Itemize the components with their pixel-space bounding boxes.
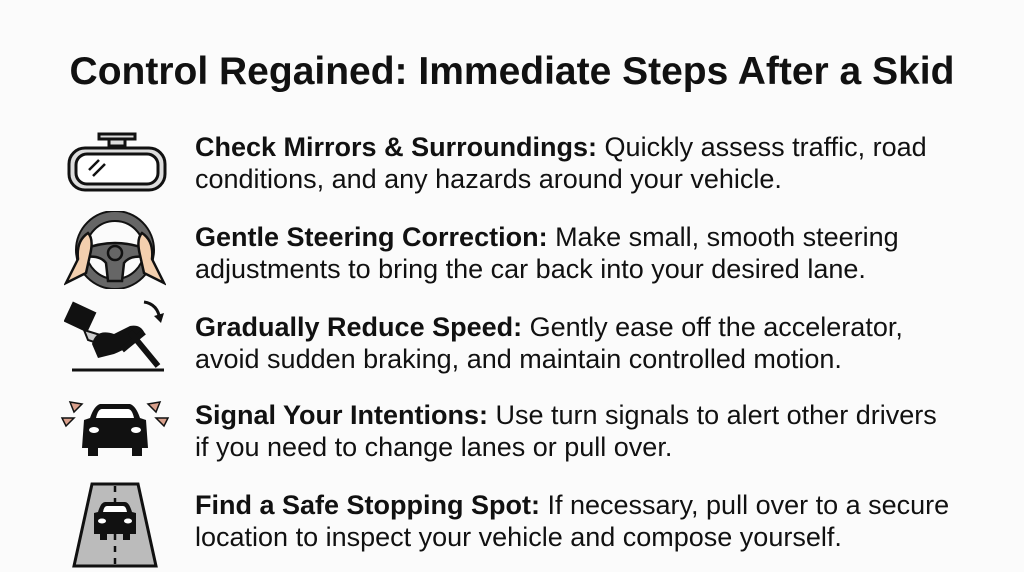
text: steering: Gentle Steering Correction: Make small, smooth steering — [195, 222, 899, 252]
icon: steering wheel — [64, 211, 166, 289]
text: signal: Signal Your Intentions: Use turn signals to alert other drivers — [195, 400, 937, 430]
text: stopping spot: location to inspect your vehicle and compose yourself. — [195, 522, 842, 552]
text: reduce speed — [195, 312, 903, 374]
icon: car with signals — [60, 401, 170, 456]
text: steering: adjustments to bring the car back into your desired lane. — [195, 254, 866, 284]
text: check mirrors — [195, 132, 927, 194]
text: check mirrors: conditions, and any hazards around your vehicle. — [195, 164, 782, 194]
text: reduce speed: avoid sudden braking, and maintain controlled motion. — [195, 344, 842, 374]
icon: rear-view mirror — [68, 132, 166, 192]
text: check mirrors: Check Mirrors & Surroundings: Quickly assess traffic, road — [195, 132, 927, 162]
title: Control Regained: Immediate Steps After a Skid — [70, 50, 954, 93]
text: stopping spot: Find a Safe Stopping Spot: If necessary, pull over to a secure — [195, 490, 949, 520]
icon: foot on pedal — [64, 300, 164, 372]
text: steering — [195, 222, 899, 284]
text: signal: if you need to change lanes or pull over. — [195, 432, 672, 462]
text: signal — [195, 400, 937, 462]
text: stopping spot — [195, 490, 949, 552]
text: reduce speed: Gradually Reduce Speed: Gently ease off the accelerator, — [195, 312, 903, 342]
icon: road with car — [72, 482, 158, 568]
